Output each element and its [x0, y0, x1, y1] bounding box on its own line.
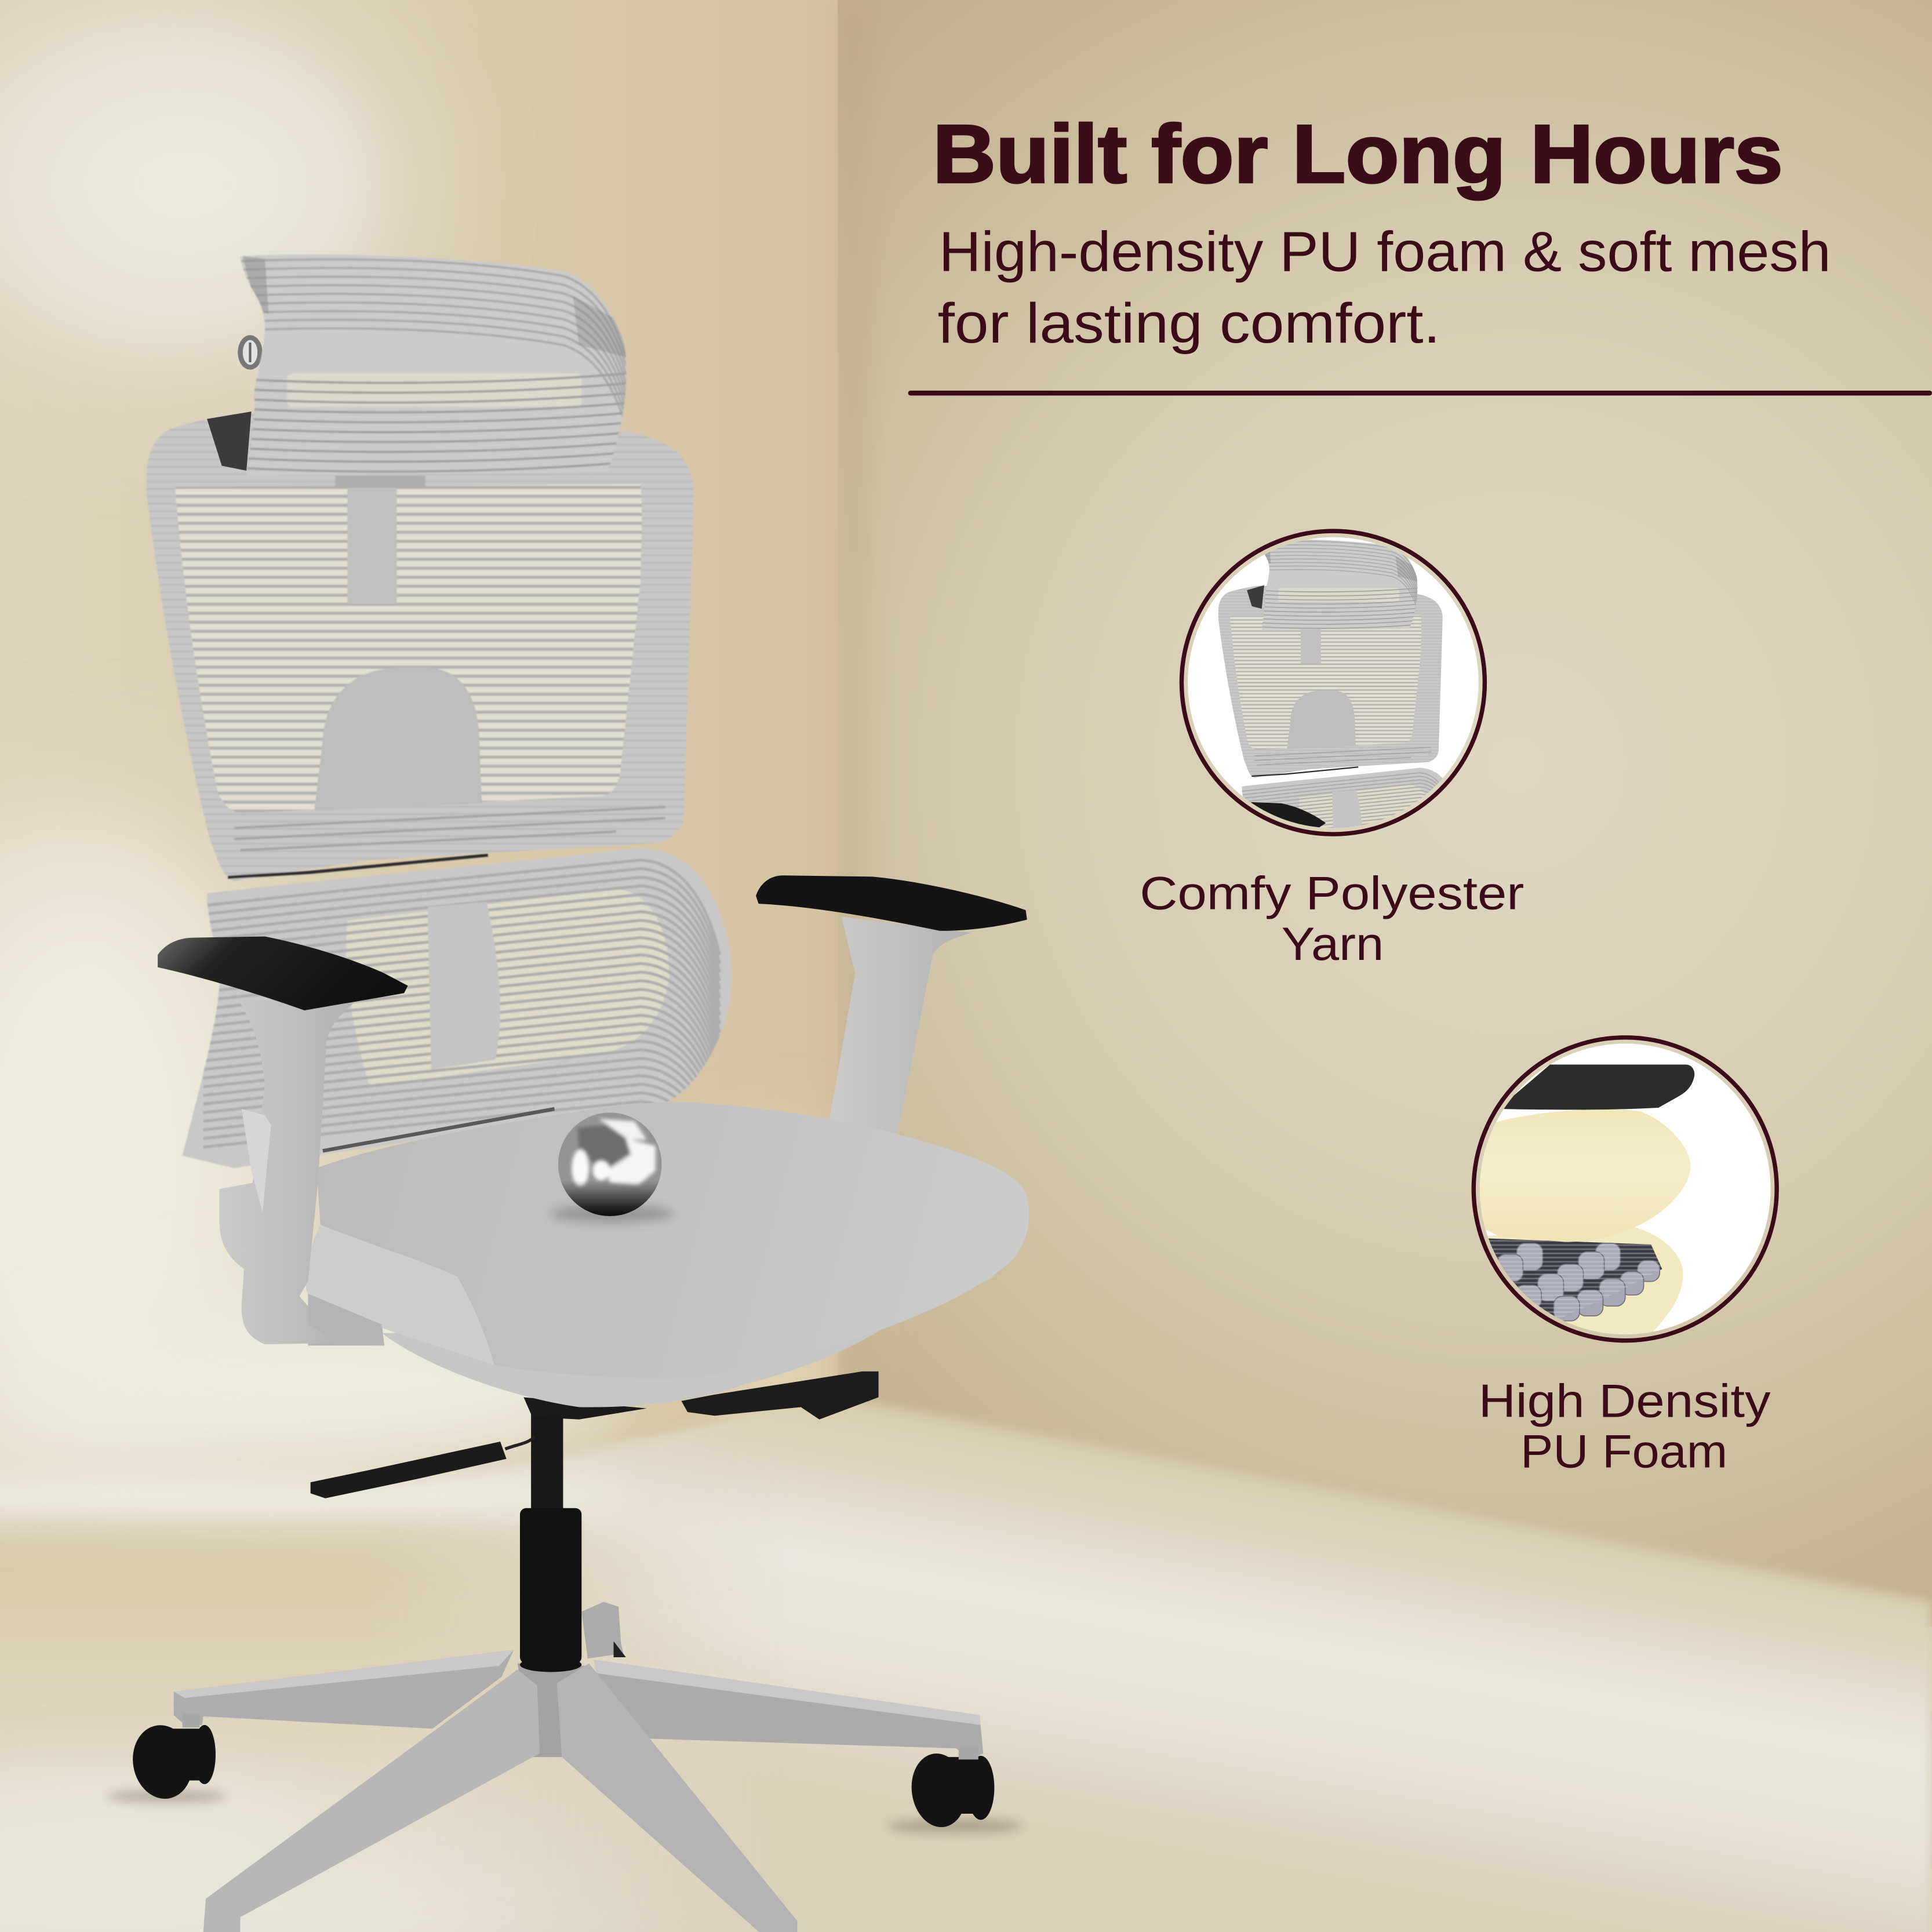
seat front seam — [305, 1225, 494, 1365]
feature: polyester yarn — [1140, 531, 1537, 970]
left armrest post — [219, 999, 384, 1345]
right armrest post — [829, 916, 971, 1136]
chair product photo — [107, 254, 1029, 1932]
title: Built for Long Hours — [933, 108, 1783, 201]
metal ball — [551, 1112, 674, 1222]
back to seat shadow — [323, 1109, 555, 1151]
under seat mechanism — [523, 1397, 647, 1420]
spring coils — [1485, 1238, 1662, 1321]
lower back mesh — [183, 847, 732, 1196]
label: high density PU foam: High Density — [1479, 1375, 1771, 1427]
headrest knob — [238, 335, 263, 370]
top foam layer — [1467, 1109, 1690, 1242]
upper back mesh — [147, 413, 694, 881]
seat cushion — [305, 1102, 1029, 1378]
feature: PU foam — [1467, 1038, 1784, 1478]
tilt lever — [681, 1371, 879, 1420]
chair base — [174, 1602, 983, 1932]
circle inset: foam layers — [1467, 1038, 1777, 1341]
gas lift cylinder — [520, 1405, 581, 1672]
seat pan — [382, 1275, 998, 1407]
subtitle text: for lasting comfort. — [938, 291, 1440, 355]
height lever — [311, 1436, 535, 1498]
casters — [127, 1714, 994, 1831]
headrest mesh — [240, 254, 628, 475]
right armrest pad — [756, 876, 1027, 930]
heading rule — [908, 391, 1932, 395]
subtitle text: High-density PU foam & soft mesh — [939, 220, 1831, 283]
circle inset: mesh close-up — [1179, 529, 1487, 836]
caster shadows — [107, 1791, 1023, 1833]
left armrest pad — [158, 936, 408, 1010]
black top layer — [1503, 1065, 1694, 1109]
label: high density PU foam: PU Foam — [1520, 1426, 1727, 1478]
foam tray — [1479, 1227, 1683, 1341]
dark corner behind headrest — [207, 412, 252, 471]
label: comfy polyester yarn: Yarn — [1282, 918, 1384, 970]
label: comfy polyester yarn: Comfy Polyester — [1140, 868, 1524, 920]
